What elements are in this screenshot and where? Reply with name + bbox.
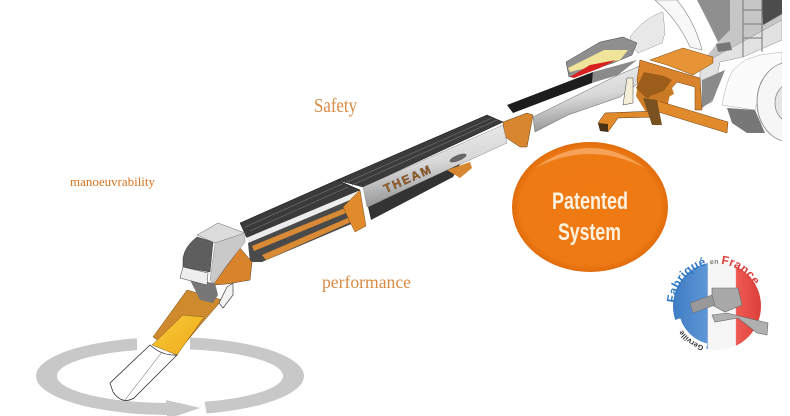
truck wheel <box>757 62 790 142</box>
truck fender disc <box>630 12 665 53</box>
turret centre mass <box>636 84 672 116</box>
dark foot <box>598 123 608 132</box>
lower dark channel <box>248 200 356 262</box>
turret frame <box>637 60 702 110</box>
disc highlight <box>535 148 645 168</box>
upper boom section <box>507 60 640 132</box>
made in France seal <box>666 256 768 350</box>
grey conveyor beam <box>533 66 640 132</box>
tube centre line <box>125 352 162 400</box>
orange chute <box>153 290 222 353</box>
truck chassis panel <box>700 20 782 107</box>
dark top rail <box>240 180 360 238</box>
cover ribs <box>345 118 497 185</box>
orange turret mount <box>598 48 728 133</box>
truck body <box>630 0 790 150</box>
truck hub <box>775 84 790 122</box>
white bottom lip <box>180 267 208 285</box>
oval logo <box>449 152 467 164</box>
truck wheel arch <box>722 52 782 110</box>
truck dark window <box>762 0 782 25</box>
knuckle <box>643 98 662 125</box>
patented system badge <box>512 142 668 272</box>
hopper <box>566 37 637 78</box>
middle boom section with THEAM marking <box>337 115 507 220</box>
orange rail two <box>262 217 351 260</box>
grey head top <box>197 223 245 243</box>
truck ladder <box>743 0 762 57</box>
ram <box>650 88 674 106</box>
grey head side <box>210 233 245 283</box>
mid boom joint <box>503 113 533 147</box>
label: performance: performance <box>322 272 411 292</box>
turret housing <box>650 48 713 75</box>
machine arm icon <box>690 295 715 313</box>
orange bracket <box>343 190 366 232</box>
boom head <box>180 223 252 308</box>
orange disc <box>512 142 668 272</box>
orange rail one <box>252 208 346 251</box>
right margin mask <box>782 0 790 150</box>
hinge bracket <box>219 283 233 308</box>
truck raised arm <box>655 0 702 50</box>
yellow chute interior <box>152 315 204 355</box>
flag disc <box>673 262 761 350</box>
orange pivot <box>213 248 252 285</box>
truck dark lower panel <box>702 70 725 108</box>
rotation arrow ring <box>36 330 304 416</box>
heading text line two: System <box>558 219 621 246</box>
seal text bottom: Gerville <box>680 330 703 350</box>
stabiliser arm <box>652 100 728 133</box>
black cover <box>337 115 503 187</box>
dark joint <box>636 72 672 98</box>
truck bracket <box>716 42 732 52</box>
label: Safety: Safety <box>314 95 357 117</box>
mesh section <box>592 60 637 83</box>
strut <box>623 78 633 105</box>
discharge chute <box>110 290 222 400</box>
bracket <box>447 162 472 178</box>
rail ribs <box>245 184 348 231</box>
THEAM marking: THEAM <box>382 163 433 196</box>
lower boom section <box>240 180 366 262</box>
machine housing icon <box>712 288 742 312</box>
dark underside <box>368 164 460 220</box>
silver panel <box>363 125 507 207</box>
truck tyre <box>727 108 765 133</box>
black belt <box>507 72 593 113</box>
label: manoeuvrability: manoeuvrability <box>70 175 156 189</box>
grey head dark face <box>183 237 213 272</box>
white telescopic tube <box>110 345 177 400</box>
truck rear base <box>697 0 782 65</box>
truck cab shadows <box>697 0 730 42</box>
white rail <box>246 191 360 243</box>
neck <box>190 280 218 303</box>
seal text top: Fabriqué en France <box>666 256 758 302</box>
white halo behind lower text <box>675 320 706 349</box>
lower bar <box>598 111 656 132</box>
machine chute icon <box>712 313 768 335</box>
heading text: Patented <box>552 188 628 215</box>
